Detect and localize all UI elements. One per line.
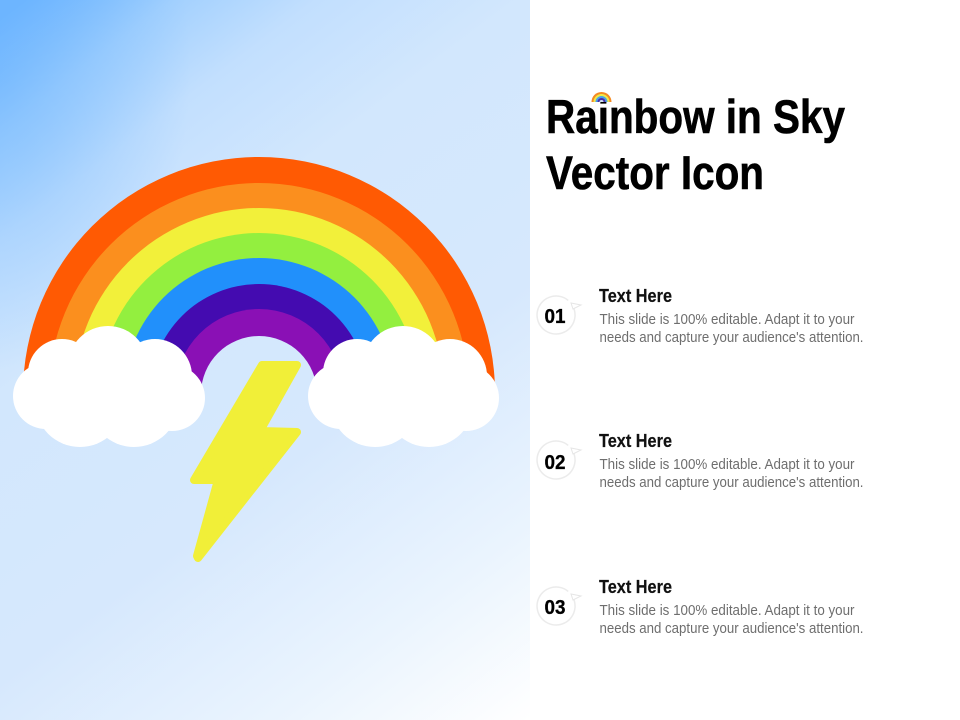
icon: lightning bolt bbox=[194, 365, 297, 558]
badge 03: 03 bbox=[544, 597, 566, 619]
item 1 bbox=[537, 286, 864, 346]
badge 02 bbox=[537, 441, 581, 479]
heading 1: Text Here bbox=[599, 286, 672, 306]
description 2: This slide is 100% editable. Adapt it to your bbox=[600, 457, 855, 473]
title: Vector Icon bbox=[546, 146, 764, 199]
icon: small rainbow above title bbox=[592, 92, 612, 102]
icon: left cloud bbox=[13, 326, 205, 447]
description 1: needs and capture your audience's attention. bbox=[600, 330, 864, 346]
icon: rainbow bbox=[23, 157, 495, 394]
title bbox=[546, 90, 845, 199]
heading 3: Text Here bbox=[599, 577, 672, 597]
badge 01: 01 bbox=[544, 306, 566, 328]
badge 02: 02 bbox=[544, 452, 566, 474]
item 2 bbox=[537, 431, 864, 491]
description 1: This slide is 100% editable. Adapt it to your bbox=[600, 312, 855, 328]
heading 2: Text Here bbox=[599, 431, 672, 451]
item 3 bbox=[537, 577, 864, 637]
badge 03 bbox=[537, 587, 581, 625]
title: Rainbow in Sky bbox=[546, 90, 845, 143]
description 3: needs and capture your audience's attention. bbox=[600, 621, 864, 637]
icon: right cloud bbox=[308, 326, 499, 447]
description 2: needs and capture your audience's attention. bbox=[600, 475, 864, 491]
description 3: This slide is 100% editable. Adapt it to your bbox=[600, 603, 855, 619]
panel: sky background bbox=[0, 0, 530, 720]
badge 01 bbox=[537, 296, 581, 334]
